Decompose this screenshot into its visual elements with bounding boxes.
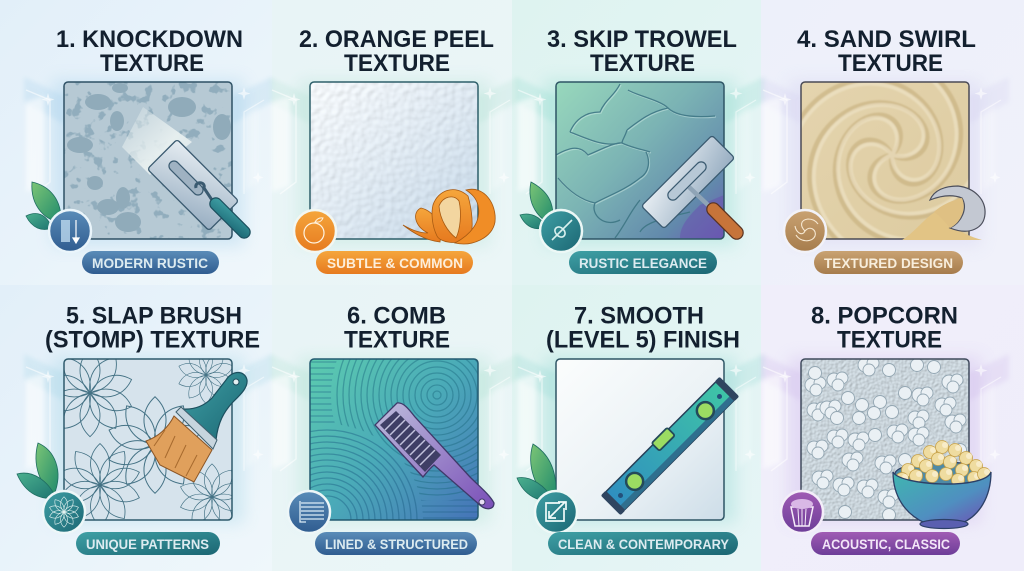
panel: smooth level 5 finish [516, 302, 764, 555]
title: comb [344, 302, 450, 354]
icon badge: skip trowel [540, 210, 582, 252]
pill: textured design [814, 251, 963, 274]
panel: skip trowel texture [516, 26, 764, 274]
title: smooth finish [546, 302, 740, 354]
pill: modern rustic: MODERN RUSTIC [92, 256, 208, 271]
sand swirl texture swatch [802, 82, 968, 238]
pill: lined and structured: LINED & STRUCTURED [325, 537, 468, 552]
icon badge: sand swirl [784, 210, 826, 252]
icon badge: expand arrows [535, 491, 577, 533]
title: skip trowel: TEXTURE [590, 50, 695, 77]
title: popcorn: TEXTURE [837, 326, 942, 354]
panel: orange peel texture [270, 26, 518, 274]
title: sand swirl: 4. SAND SWIRL [797, 26, 976, 53]
title: knockdown [56, 26, 243, 77]
orange peel texture swatch [310, 82, 478, 239]
title: orange peel: 2. ORANGE PEEL [299, 26, 494, 53]
title: comb: 6. COMB [347, 302, 446, 330]
knockdown texture swatch [64, 82, 232, 239]
icon badge: orange [294, 210, 336, 252]
title: popcorn: 8. POPCORN [811, 302, 958, 330]
title: comb: TEXTURE [344, 326, 450, 354]
panel: slap brush texture [17, 302, 272, 555]
comb texture swatch [310, 360, 478, 520]
icon: orange peel curls [403, 189, 495, 244]
pill: rustic elegance: RUSTIC ELEGANCE [579, 256, 707, 271]
icon: trowel [147, 139, 253, 241]
title: slap brush [45, 302, 260, 354]
pill: modern rustic [82, 251, 219, 274]
icon: leaves [17, 443, 58, 498]
icon: leaves [26, 182, 61, 230]
title: skip trowel [547, 26, 737, 77]
pill: rustic elegance [569, 251, 717, 274]
title: sand swirl: TEXTURE [838, 50, 943, 77]
icon: sand scoop [902, 186, 985, 240]
panel: knockdown texture [24, 26, 272, 274]
skip trowel texture swatch [556, 82, 724, 239]
title: slap brush: 5. SLAP BRUSH [66, 302, 242, 330]
title: smooth finish: 7. SMOOTH [574, 302, 704, 330]
title: orange peel: TEXTURE [344, 50, 450, 77]
icon: leaves [520, 182, 553, 229]
title: smooth finish: (LEVEL 5) FINISH [546, 326, 740, 354]
popcorn texture swatch [801, 357, 969, 522]
smooth white swatch [556, 359, 724, 520]
title: sand swirl [797, 26, 976, 77]
pill: clean and contemporary [548, 532, 738, 555]
title: skip trowel: 3. SKIP TROWEL [547, 26, 737, 53]
icon badge: popcorn box [781, 491, 823, 533]
icon badge: flower [43, 491, 85, 533]
icon badge: knockdown [49, 210, 91, 252]
pill: unique patterns [76, 532, 220, 555]
pill: subtle and common [316, 251, 473, 274]
title: orange peel [299, 26, 494, 77]
pill: clean and contemporary: CLEAN & CONTEMPORARY [558, 537, 729, 552]
pill: acoustic classic: ACOUSTIC, CLASSIC [822, 537, 950, 552]
pill: textured design: TEXTURED DESIGN [824, 256, 953, 271]
pill: acoustic classic [811, 532, 960, 555]
title: knockdown: TEXTURE [100, 50, 204, 77]
icon: leaves [517, 444, 556, 501]
title: slap brush: (STOMP) TEXTURE [45, 326, 260, 354]
icon: comb [375, 403, 494, 509]
icon: skip trowel [641, 135, 746, 242]
panel: popcorn texture [761, 302, 1009, 555]
panel: comb texture [271, 306, 517, 555]
pill: unique patterns: UNIQUE PATTERNS [86, 537, 209, 552]
title: popcorn [811, 302, 958, 354]
pill: subtle and common: SUBTLE & COMMON [327, 256, 463, 271]
icon: paint brush [146, 372, 247, 482]
title: knockdown: 1. KNOCKDOWN [56, 26, 243, 53]
icon: popcorn bowl [893, 440, 991, 528]
pill: lined and structured [315, 532, 477, 555]
icon: spirit level [600, 376, 739, 515]
slap brush texture swatch [64, 360, 232, 520]
icon badge: lines [288, 491, 330, 533]
panel: sand swirl texture [763, 30, 1006, 274]
